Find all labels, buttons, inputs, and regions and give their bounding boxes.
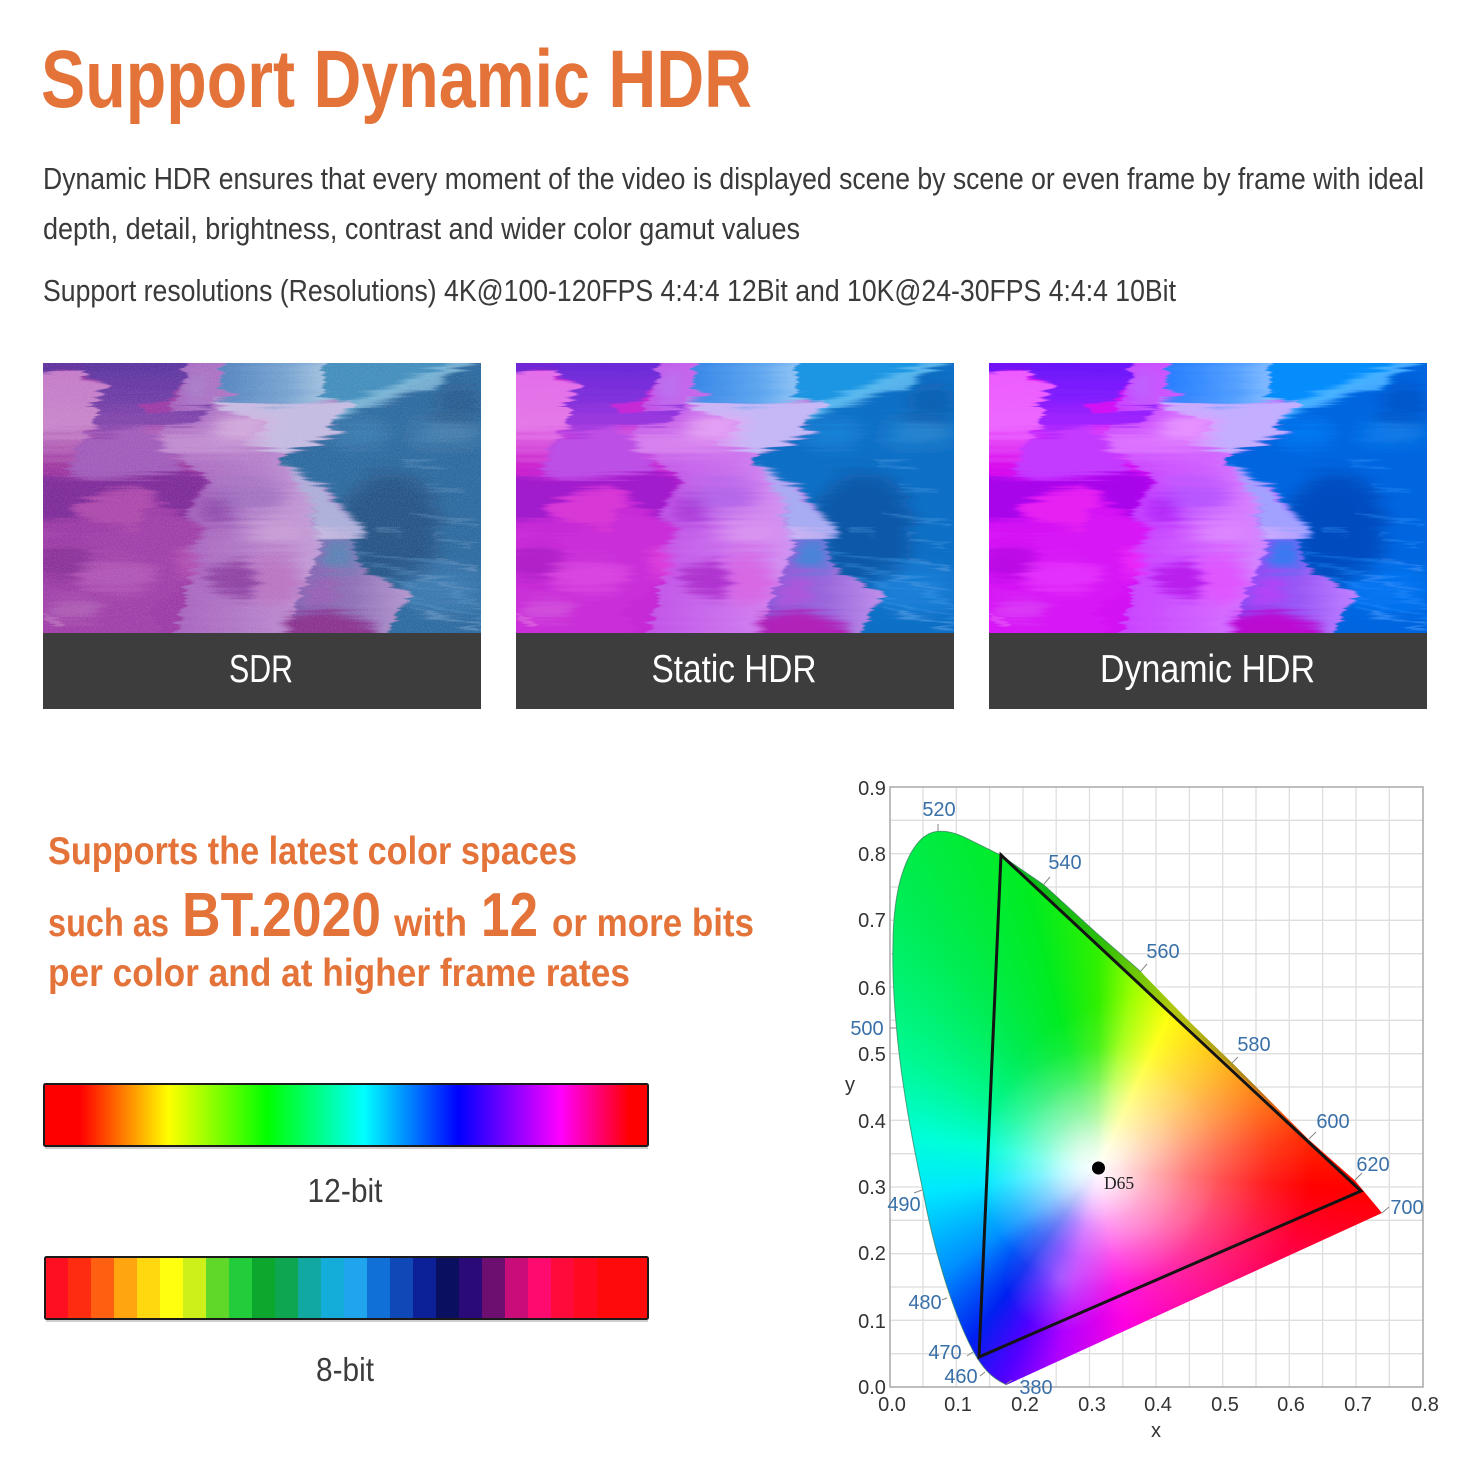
- y axis labels: 0.8: [858, 844, 886, 866]
- intro text block: [43, 161, 1424, 308]
- wavelength labels: 500: [850, 1018, 884, 1040]
- wavelength labels: 380: [1019, 1377, 1053, 1399]
- heading: colour spaces: or more bits: [552, 902, 754, 945]
- y axis labels: 0.4: [858, 1111, 886, 1133]
- y axis labels: 0.5: [858, 1044, 886, 1066]
- wavelength labels: 470: [928, 1342, 962, 1364]
- x axis labels: 0.7: [1344, 1394, 1372, 1416]
- wavelength labels: 560: [1146, 941, 1180, 963]
- heading: colour spaces: [48, 830, 754, 995]
- wavelength labels: 540: [1048, 852, 1082, 874]
- heading: colour spaces: Supports the latest color spaces: [48, 830, 577, 873]
- x axis labels: 0.6: [1277, 1394, 1305, 1416]
- wavelength labels: 600: [1316, 1111, 1350, 1133]
- label: 8-bit: 8-bit: [316, 1351, 374, 1388]
- wavelength ticks: [890, 824, 1389, 1385]
- x axis labels: [878, 1394, 1439, 1442]
- panel: Dynamic HDR comparison: [959, 333, 1459, 709]
- D65 white point: D65: [1104, 1173, 1134, 1193]
- wavelength labels: 460: [944, 1366, 978, 1388]
- x axis labels: 0.3: [1078, 1394, 1106, 1416]
- intro text block: depth, detail, brightness, contrast and wider color gamut values: [43, 211, 800, 246]
- wavelength labels: 580: [1237, 1034, 1271, 1056]
- wavelength labels: 490: [887, 1194, 921, 1216]
- chart: CIE chromaticity diagram: [845, 778, 1439, 1442]
- wavelength labels: [850, 799, 1424, 1399]
- y axis labels: 0.0: [858, 1377, 886, 1399]
- y axis labels: 0.9: [858, 778, 886, 800]
- x axis labels: 0.0: [878, 1394, 906, 1416]
- heading: colour spaces: with: [393, 902, 467, 945]
- y axis labels: 0.6: [858, 978, 886, 1000]
- D65 white point: [1092, 1162, 1134, 1193]
- wavelength labels: 520: [922, 799, 956, 821]
- 12-bit gradient bar: [44, 1084, 648, 1148]
- panel: SDR comparison: [13, 333, 513, 709]
- wavelength labels: 480: [908, 1292, 942, 1314]
- x axis labels: 0.8: [1411, 1394, 1439, 1416]
- 8-bit stepped bar: [45, 1257, 648, 1321]
- wavelength labels: 700: [1390, 1197, 1424, 1219]
- x axis labels: 0.1: [944, 1394, 972, 1416]
- y axis labels: [845, 778, 886, 1399]
- y axis labels: 0.7: [858, 910, 886, 932]
- panel: Dynamic HDR comparison: Dynamic HDR: [1100, 648, 1315, 691]
- heading: colour spaces: 12: [481, 881, 538, 950]
- heading: colour spaces: such as: [48, 902, 169, 945]
- x axis labels: 0.5: [1211, 1394, 1239, 1416]
- heading: colour spaces: per color and at higher frame rates: [48, 952, 630, 995]
- colour gamut locus: [892, 831, 1382, 1385]
- y axis labels: y: [845, 1074, 855, 1096]
- heading: colour spaces: BT.2020: [182, 881, 381, 950]
- gamut triangle: [979, 855, 1361, 1357]
- y axis labels: 0.2: [858, 1243, 886, 1265]
- label: 12-bit: 12-bit: [308, 1172, 382, 1209]
- panel: SDR comparison: SDR: [229, 648, 293, 691]
- intro text block: Support resolutions (Resolutions) 4K@100-120FPS 4:4:4 12Bit and 10K@24-30FPS 4:4:4 10Bit: [43, 273, 1176, 308]
- title: Support Dynamic HDR: [41, 34, 752, 125]
- wavelength labels: 620: [1356, 1154, 1390, 1176]
- y axis labels: 0.3: [858, 1177, 886, 1199]
- panel: Static HDR comparison: [486, 333, 986, 709]
- y axis labels: 0.1: [858, 1311, 886, 1333]
- x axis labels: 0.2: [1011, 1394, 1039, 1416]
- x axis labels: 0.4: [1144, 1394, 1172, 1416]
- x axis labels: x: [1151, 1420, 1161, 1442]
- panel: Static HDR comparison: Static HDR: [652, 648, 816, 691]
